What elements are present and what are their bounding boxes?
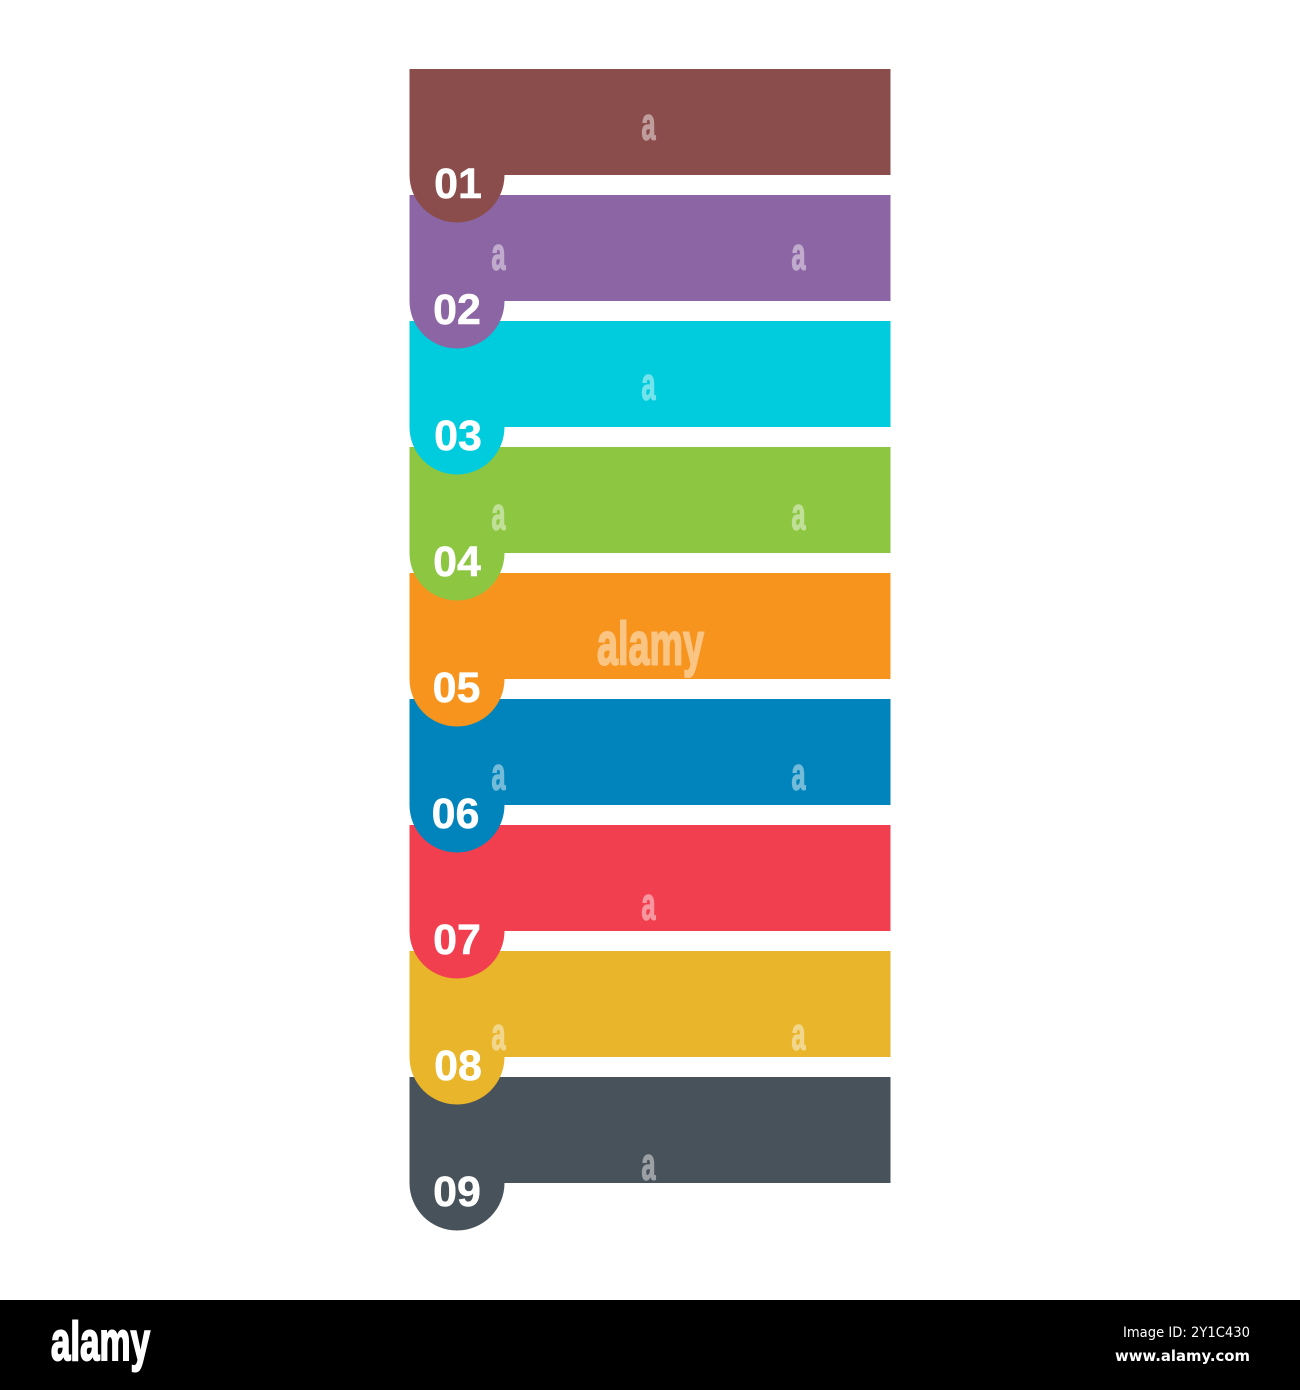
footer logo: alamy bbox=[51, 1310, 150, 1372]
banner 05: 05 bbox=[433, 664, 480, 712]
banner 07 bbox=[410, 825, 890, 978]
banner 04 bbox=[410, 447, 890, 601]
footer bar bbox=[0, 1300, 1300, 1390]
banner 06: a bbox=[492, 748, 506, 800]
banner 07: a bbox=[642, 878, 656, 930]
banner 09 bbox=[410, 1077, 890, 1230]
banner 09: a bbox=[642, 1138, 656, 1190]
banner 03: a bbox=[642, 358, 656, 410]
banner 04: a bbox=[792, 488, 806, 540]
banner 02 bbox=[410, 195, 890, 349]
banner 01 bbox=[410, 69, 890, 223]
banner 06: 06 bbox=[432, 790, 479, 838]
banner 06 bbox=[410, 699, 890, 852]
banner 01: a bbox=[642, 98, 656, 150]
banner 04: 04 bbox=[433, 538, 481, 586]
banner 09: 09 bbox=[433, 1168, 481, 1216]
banner 06: a bbox=[792, 748, 806, 800]
banner 08: a bbox=[492, 1008, 506, 1060]
banner 05: alamy bbox=[597, 610, 704, 678]
banner 03: 03 bbox=[434, 412, 482, 460]
banner 07: 07 bbox=[433, 916, 481, 964]
banner 04: a bbox=[492, 488, 506, 540]
banner 05 bbox=[410, 573, 890, 727]
banner 03 bbox=[410, 321, 890, 475]
website: www.alamy.com bbox=[1115, 1347, 1250, 1365]
image id: Image ID: 2Y1C430 bbox=[1123, 1325, 1250, 1341]
banner 08: a bbox=[792, 1008, 806, 1060]
banner 02: a bbox=[492, 228, 506, 280]
banner 08: 08 bbox=[434, 1042, 482, 1090]
banner 08 bbox=[410, 951, 890, 1104]
banner 02: a bbox=[792, 228, 806, 280]
banner 01: 01 bbox=[434, 160, 482, 208]
banner 02: 02 bbox=[433, 286, 481, 334]
